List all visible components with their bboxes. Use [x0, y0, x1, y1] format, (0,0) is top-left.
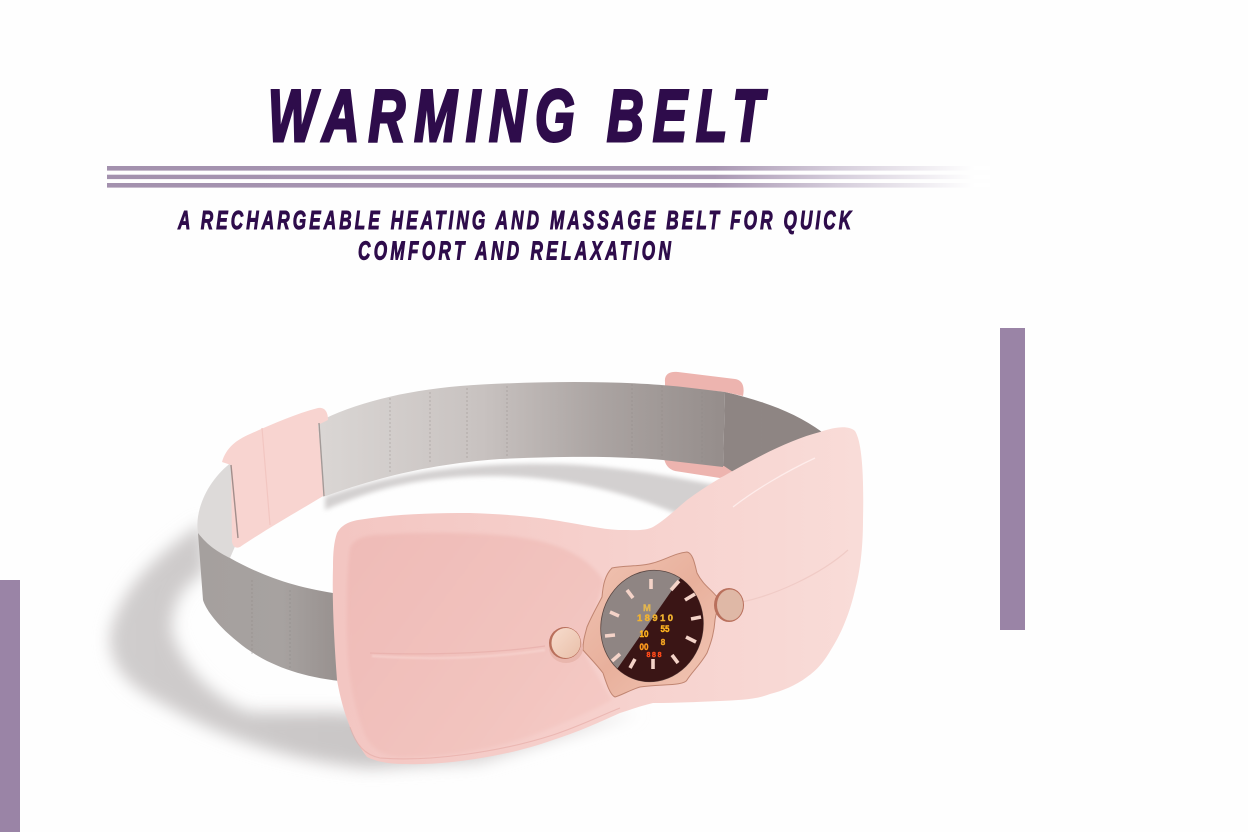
left button: [549, 627, 583, 663]
right button: [714, 588, 744, 622]
strap inner left: [197, 462, 240, 558]
right lobe crease: [742, 550, 848, 602]
title: WARMING BELT: [268, 76, 767, 157]
LED readout: M: [643, 603, 651, 614]
accent bar right: [1000, 328, 1025, 630]
strap stitching: [390, 384, 762, 472]
triple divider lines: [107, 166, 990, 188]
subtitle: [177, 205, 853, 265]
LED readout: 8: [661, 638, 666, 647]
LED readout: [637, 603, 673, 659]
dial face: [589, 559, 715, 693]
pink massage body: [333, 427, 863, 764]
subtitle: COMFORT AND RELAXATION: [358, 236, 672, 265]
subtitle: A RECHARGEABLE HEATING AND MASSAGE BELT FOR QUICK: [177, 205, 853, 235]
left lobe crease: [370, 646, 545, 654]
right lobe highlight: [733, 458, 815, 507]
LED readout: 00: [640, 642, 648, 653]
LED readout: 10: [640, 629, 648, 640]
cast shadow: [110, 464, 720, 768]
strap front left: [198, 533, 340, 681]
left lobe face: [347, 533, 612, 757]
lower rim: [350, 708, 620, 759]
belt product illustration: [110, 372, 863, 768]
accent bar left: [0, 580, 20, 832]
back strap right section: [723, 392, 822, 472]
warming belt infographic: [0, 88, 1025, 832]
control dial: [583, 552, 720, 697]
buckle: [664, 372, 744, 478]
hour ticks: [605, 579, 701, 669]
left pink slider: [222, 408, 328, 548]
LED readout: 888: [646, 652, 662, 659]
back strap: [318, 382, 725, 497]
star bezel: [583, 552, 718, 697]
LED readout: 55: [660, 624, 670, 635]
LED readout: 18910: [637, 613, 673, 624]
